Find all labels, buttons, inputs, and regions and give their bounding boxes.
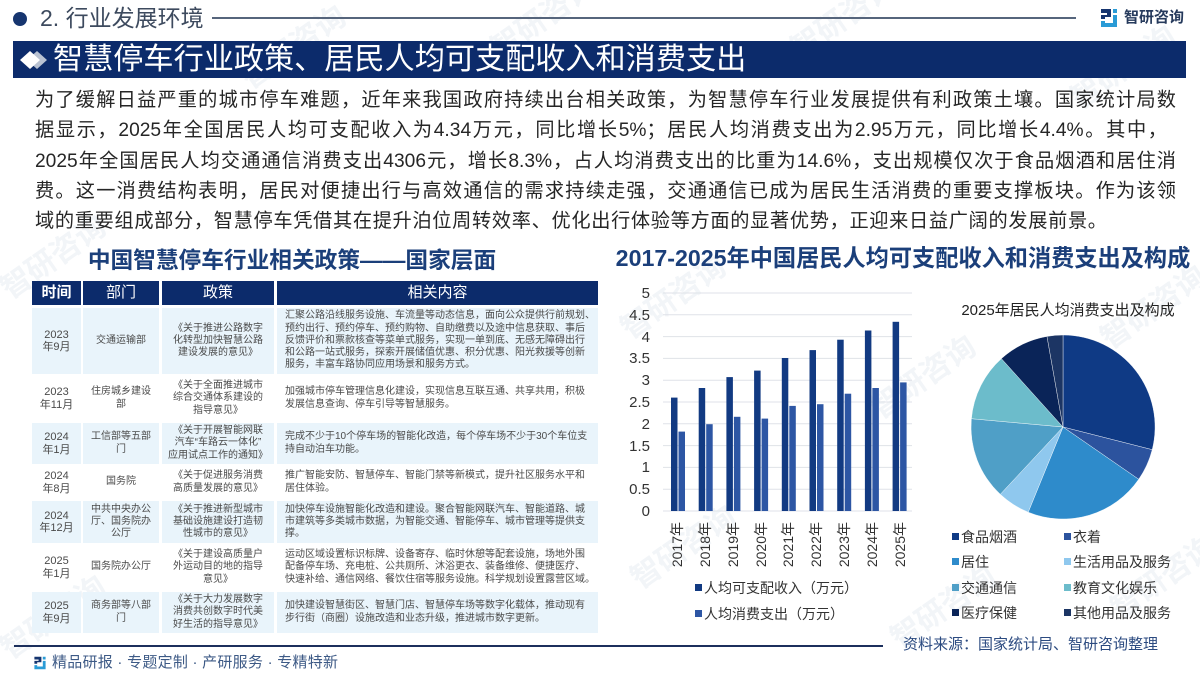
y axis labels: 1.5 [629,438,650,455]
row 2023-11: 发展信息查询、停车引导等智慧服务。 [285,398,455,410]
row 2025-09: 《关于大力发展数字 [173,594,263,605]
row 2024-12: 年12月 [39,522,74,534]
row 2023-09: 交通运输部 [96,335,146,346]
row 2024-12: 公厅 [111,528,131,539]
row 2024-08: 年8月 [42,482,71,494]
row 2024-12: 2024 [44,510,69,522]
y axis labels: 0.5 [629,481,650,498]
pie chart legend: 其他用品及服务 [1073,605,1171,621]
y axis labels: 2 [642,416,650,433]
bar chart legend [695,580,858,622]
row 2025-01: 运动区域设置标识标牌、设备寄存、临时休憩等配套设施，场地外围 [285,549,585,560]
intro paragraph: 域的重要组成部分，智慧停车凭借其在提升泊位周转效率、优化出行体验等方面的显著优势，正迎来日益广阔的发展前景。 [35,211,1107,232]
icon: diamonds [20,51,47,69]
row 2023-09: 和公路一站式服务，探索开展储值优惠、积分优惠、阳光救援等创新 [285,347,585,358]
table heading: 中国智慧停车行业相关政策——国家层面 [88,247,496,273]
row 2023-11: 年11月 [40,398,73,410]
table header [32,281,598,305]
row 2023-11: 指导意见》 [193,405,243,416]
row 2023-11 [40,379,585,416]
row 2025-09 [32,592,598,633]
table header: 相关内容 [407,284,468,301]
row 2023-09: 建设发展的意见》 [178,347,258,358]
x axis labels: 2025年 [892,522,908,567]
row 2023-09: 反馈评价和票款核查等菜单式服务，实现一单到底、无感无障碍出行 [285,335,585,346]
row 2023-09: 预约出行、预约停车、预约购物、自助缴费以及途中信息获取、事后 [285,323,585,334]
row 2024-01: 持自动泊车功能。 [285,444,365,454]
row 2025-01: 配备停车场、充电桩、公共厕所、沐浴更衣、装备维修、便捷医疗、 [285,561,585,572]
row 2024-01: 工信部等五部 [91,431,151,442]
row 2024-12: 加快停车设施智能化改造和建设。聚合智能网联汽车、智能道路、城 [285,504,585,515]
row 2024-01: 汽车“车路云一体化” [175,437,261,448]
pie chart legend: 居住 [961,554,989,570]
intro paragraph: 为了缓解日益严重的城市停车难题，近年来我国政府持续出台相关政策，为智慧停车行业发展提供有利政策土壤。国家统计局数 [35,90,1176,111]
intro paragraph [35,89,1176,232]
row 2023-09: 《关于推进公路数字 [173,323,263,334]
row 2023-09: 汇聚公路沿线服务设施、车流量等动态信息，面向公众提供行前规划、 [285,310,595,321]
row 2023-11: 2023 [44,386,69,398]
row 2024-08: 国务院 [106,476,136,487]
bar chart: income and spending [629,285,912,567]
chart heading: 2017-2025年中国居民人均可支配收入和消费支出及构成 [616,245,1190,271]
row 2024-12 [32,501,598,543]
row 2025-01: 国务院办公厅 [91,561,151,572]
pie chart legend: 交通通信 [961,580,1017,596]
icon: brand mark [1101,9,1117,27]
footer slogan: 精品研报 · 专题定制 · 产研服务 · 专精特新 [52,654,338,671]
row 2023-11: 加强城市停车管理信息化建设，实现信息互联互通、共享共用，积极 [285,386,585,397]
text: 智研咨询 [235,0,352,96]
row 2025-09: 年9月 [42,612,71,624]
text: 智研咨询 [615,250,732,346]
row 2025-09: 好生活的指导意见》 [173,619,263,630]
row 2024-12: 性城市的意见》 [183,528,253,539]
row 2024-01: 完成不少于10个停车场的智能化改造，每个停车场不少于30个车位支 [285,431,587,442]
row 2024-08: 《关于促进服务消费 [173,470,263,481]
title: 智慧停车行业政策、居民人均可支配收入和消费支出 [53,43,746,76]
row 2023-09: 服务，丰富车路协同应用场景和服务方式。 [285,359,475,370]
row 2025-09: 商务部等八部 [91,600,151,611]
row 2025-09: 门 [116,612,126,624]
row 2024-01: 应用试点工作的通知》 [168,450,268,461]
bar chart legend: 人均消费支出（万元） [704,606,844,622]
text: 智研咨询 [1065,20,1182,116]
icon: footer brand mark [34,656,46,670]
row 2023-09: 化转型加快智慧公路 [173,335,263,346]
row 2024-12: 基础设施建设打造韧 [173,516,263,527]
y axis labels: 4.5 [629,307,650,324]
row 2025-01: 快速补给、通信网络、餐饮住宿等服务设施。科学规划设置露营区域。 [285,574,595,585]
title banner [13,41,1186,78]
row 2024-01: 2024 [44,431,69,443]
row 2024-01 [32,423,598,464]
heading rule [212,17,1076,18]
y axis labels [629,285,650,520]
pie chart: spending composition [971,335,1156,519]
table header: 时间 [41,284,72,301]
intro paragraph: 2025年全国居民人均交通通信消费支出4306元，增长8.3%，占人均消费支出的比重为14.6%，支出规模仅次于食品烟酒和居住消 [35,150,1176,172]
pie chart legend: 生活用品及服务 [1073,554,1171,570]
text: 智研咨询 [865,330,982,426]
x axis labels [669,522,908,567]
intro paragraph: 费。这一消费结构表明，居民对便捷出行与高效通信的需求持续走强，交通通信已成为居民生活消费的重要支撑板块。作为该领 [35,181,1176,202]
row 2024-01: 《关于开展智能网联 [173,425,263,436]
row 2023-11: 《关于全面推进城市 [173,380,263,391]
row 2024-08: 2024 [44,470,69,482]
x axis labels: 2024年 [864,522,880,567]
row 2025-09: 加快建设智慧街区、智慧门店、智慧停车场等数字化载体，推动现有 [285,600,585,611]
income bars [671,322,899,511]
row 2025-09: 步行街（商圈）设施改造和业态升级，推进城市数字更新。 [285,612,545,624]
row 2024-08: 推广智能安防、智慧停车、智能门禁等新模式，提升社区服务水平和 [285,470,585,481]
pie chart title: 2025年居民人均消费支出及构成 [961,302,1175,319]
brand name: 智研咨询 [1124,9,1184,26]
row 2025-09: 消费共创数字时代美 [173,606,263,617]
y axis labels: 2.5 [629,394,650,411]
pie chart legend: 医疗保健 [961,605,1017,621]
x axis labels: 2021年 [780,522,796,567]
row 2024-01: 门 [116,444,126,454]
row 2025-01: 意见》 [203,574,233,585]
x axis labels: 2017年 [669,522,685,567]
row 2025-01: 《关于建设高质量户 [173,549,263,560]
y axis labels: 3.5 [629,350,650,367]
logo: brand [1101,9,1184,27]
x axis labels: 2018年 [697,522,713,567]
row 2024-08: 居住体验。 [285,482,335,494]
row 2025-01: 2025 [44,555,69,567]
y axis labels: 4 [642,329,650,346]
source note: 资料来源：国家统计局、智研咨询整理 [903,636,1158,653]
y axis labels: 3 [642,372,650,389]
x axis labels: 2019年 [725,522,741,567]
row 2024-08 [42,469,585,494]
section heading [13,5,1076,31]
row 2024-12: 市建筑等多类城市数据，为智能交通、智能停车、城市管理等提供支 [285,516,585,527]
row 2024-12: 撑。 [285,528,305,539]
x axis labels: 2023年 [836,522,852,567]
row 2024-08: 高质量发展的意见》 [173,482,263,494]
footer [34,654,338,671]
pie chart legend [952,529,1171,621]
row 2025-09: 2025 [44,600,69,612]
y axis labels: 1 [642,459,650,476]
row 2025-01: 外运动目的地的指导 [173,561,263,572]
row 2023-09: 年9月 [42,341,71,353]
icon: section dot [13,12,27,26]
row 2023-11: 综合交通体系建设的 [173,392,263,403]
x axis labels: 2020年 [753,522,769,567]
row 2024-12: 《关于推进新型城市 [173,504,263,515]
row 2024-12: 中共中央办公 [91,504,151,515]
bar chart legend: 人均可支配收入（万元） [704,580,858,596]
row 2024-01: 年1月 [42,444,71,456]
spending bars [678,382,907,511]
policy table [32,281,598,633]
text: 智研咨询 [625,500,742,596]
y axis labels: 0 [642,503,650,520]
row 2025-01 [42,548,595,585]
pie chart legend: 衣着 [1073,529,1101,545]
intro paragraph: 据显示，2025年全国居民人均可支配收入为4.34万元，同比增长5%；居民人均消费支出为2.95万元，同比增长4.4%。其中， [35,120,1167,141]
row 2023-11: 住房城乡建设 [91,386,151,397]
text: 智研咨询 [885,560,1002,656]
pie chart legend: 教育文化娱乐 [1073,580,1157,596]
row 2023-09 [32,308,598,374]
row 2025-01: 年1月 [42,568,71,580]
row 2023-09: 2023 [44,328,69,340]
table header: 部门 [106,284,136,301]
section heading text: 2. 行业发展环境 [40,5,204,31]
pie chart legend: 食品烟酒 [961,529,1017,545]
row 2023-11: 部 [116,398,126,410]
table header: 政策 [203,284,233,301]
y axis labels: 5 [642,285,650,302]
row 2024-12: 厅、国务院办 [91,516,151,527]
x axis labels: 2022年 [808,522,824,567]
